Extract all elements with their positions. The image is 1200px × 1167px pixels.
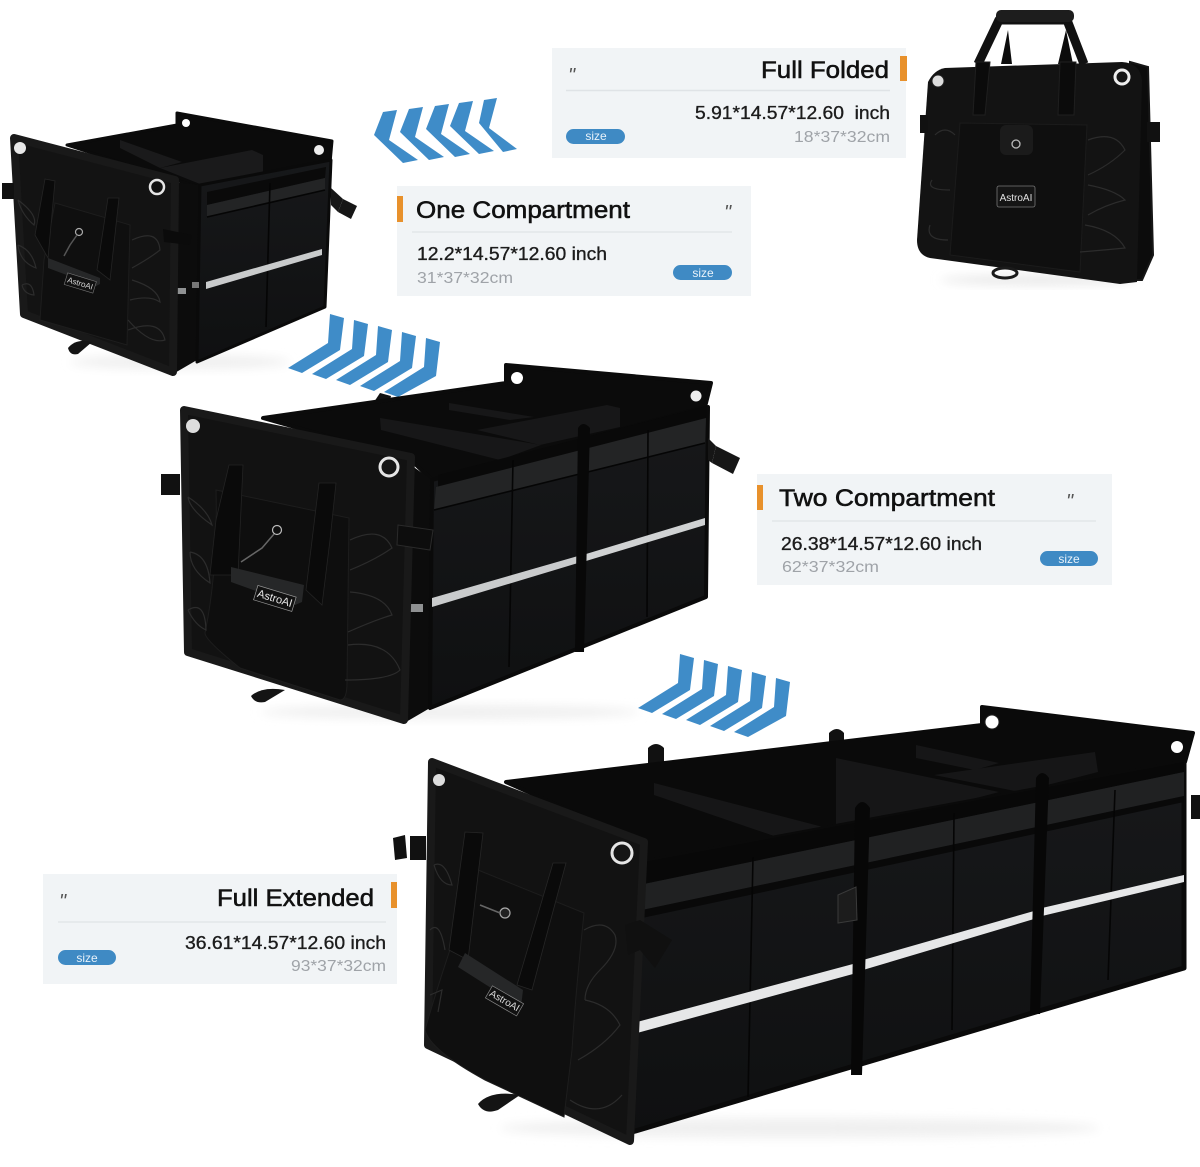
right wall (197, 160, 331, 362)
panel: full extended: size (76, 951, 98, 965)
organizer: two compartment (161, 365, 740, 722)
panel: full folded (552, 48, 907, 158)
right tab (1191, 795, 1200, 819)
arrows: folding direction top (374, 98, 517, 163)
left tab (161, 474, 180, 495)
panel: full extended: 93*37*32cm (291, 958, 386, 975)
pocket (425, 870, 584, 1117)
panel: one compartment: 12.2*14.57*12.60 inch (417, 244, 607, 264)
vertical strap (575, 424, 590, 652)
arrows: one to two compartment (288, 314, 440, 397)
bottom loop (478, 1094, 520, 1112)
bottom loop (993, 268, 1017, 278)
top tab (372, 393, 391, 408)
panel: two compartment: 62*37*32cm (782, 559, 879, 576)
center buckle (838, 887, 857, 923)
handles (978, 20, 1084, 64)
interior (67, 113, 332, 187)
panel: two compartment: 26.38*14.57*12.60 inch (781, 534, 982, 554)
reflective stripe (206, 249, 322, 289)
front face (14, 138, 175, 372)
right wall (430, 407, 708, 708)
side buckle (163, 229, 192, 245)
panel: full folded: Full Folded (761, 57, 889, 84)
carry straps (973, 62, 1076, 115)
panel: two compartment: size (1058, 552, 1080, 566)
handle (458, 953, 523, 1007)
handle (48, 258, 100, 286)
grommets (186, 372, 702, 476)
bag body (917, 62, 1142, 284)
reflective stripe (637, 964, 853, 1033)
organizer: one compartment (2, 113, 357, 374)
brand label (997, 186, 1035, 207)
reflective stripe (432, 556, 578, 607)
panel: two compartment: " (1066, 491, 1074, 513)
brand label: AstroAI (487, 988, 521, 1014)
panel: one compartment: " (724, 202, 732, 224)
cords (929, 130, 1125, 252)
straps (449, 832, 566, 990)
panel: one compartment (397, 186, 751, 296)
grommets (14, 119, 324, 194)
vertical straps (851, 773, 1049, 1075)
pocket (205, 490, 349, 700)
straps (210, 465, 336, 605)
right buckle (708, 438, 740, 474)
key hardware (1000, 125, 1033, 155)
key ring (272, 526, 282, 534)
dividers (120, 140, 263, 184)
handle (231, 567, 304, 605)
top tabs (648, 729, 844, 768)
pocket (950, 123, 1087, 272)
brand label: AstroAI (66, 275, 94, 292)
brand label: AstroAI (1000, 193, 1032, 204)
interior (263, 365, 711, 480)
brand label (64, 273, 96, 293)
panel: one compartment: 31*37*32cm (417, 270, 513, 287)
grommets (433, 715, 1183, 863)
pocket (40, 203, 130, 345)
panel: full extended: 36.61*14.57*12.60 inch (185, 933, 386, 953)
left tab and buckle (393, 835, 426, 860)
panel: full folded: size (585, 129, 607, 143)
side buckle (397, 525, 433, 550)
straps (35, 179, 119, 280)
panel: full extended: " (59, 891, 67, 913)
bottom loop (251, 689, 285, 702)
panel: two compartment: Two Compartment (779, 485, 995, 512)
panel: two compartment (757, 474, 1112, 585)
cords (188, 497, 400, 680)
dividers (654, 745, 1098, 838)
panel: one compartment: size (692, 266, 714, 280)
front face (184, 410, 411, 720)
organizer: full folded (917, 10, 1160, 285)
key hardware (500, 908, 510, 918)
panel: full extended (43, 874, 397, 984)
right wall (632, 762, 1184, 1132)
organizer: full extended (393, 707, 1200, 1141)
panel: full extended: Full Extended (217, 885, 374, 912)
panel: full folded: 5.91*14.57*12.60 inch (695, 103, 890, 123)
left tab (2, 183, 14, 199)
front face (428, 762, 644, 1141)
brand label: AstroAI (256, 588, 294, 610)
interior (506, 707, 1193, 862)
arrows: two compartment to full extended (638, 654, 790, 737)
side tabs (920, 115, 1160, 142)
dividers (380, 403, 620, 460)
side buckle (625, 920, 672, 968)
cords (18, 200, 165, 341)
bottom loop (68, 341, 92, 354)
grommets (932, 70, 1129, 87)
right buckle (331, 188, 357, 219)
outer layers (1125, 62, 1153, 280)
panel: one compartment: One Compartment (416, 197, 630, 224)
panel: full folded: " (568, 65, 576, 87)
panel: full folded: 18*37*32cm (794, 129, 890, 146)
fold strip (406, 463, 432, 722)
cords (430, 864, 622, 1109)
fold strips (172, 182, 200, 374)
